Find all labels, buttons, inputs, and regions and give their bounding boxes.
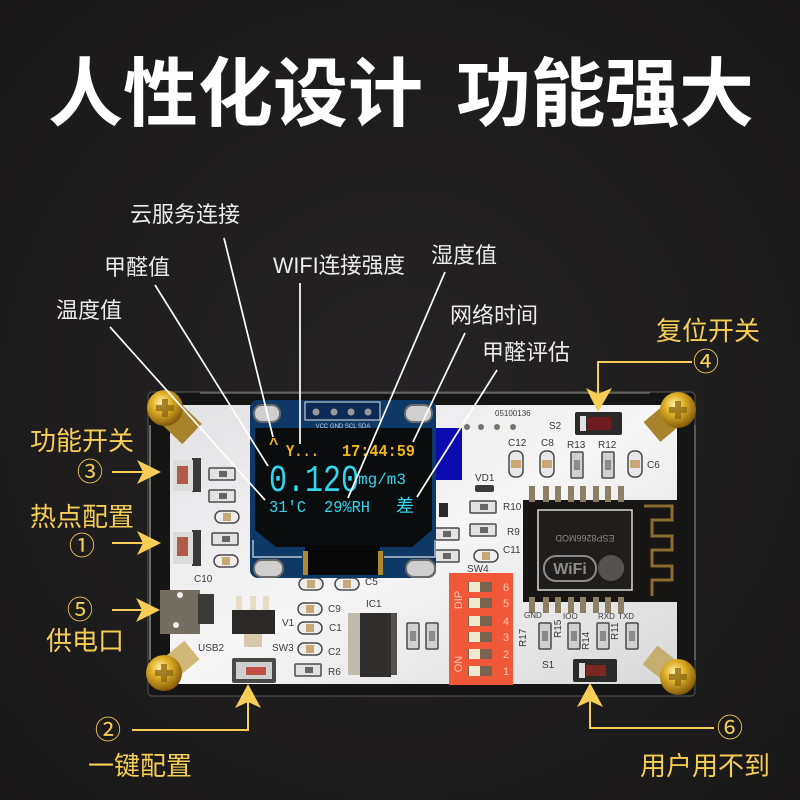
number 5: ⑤ <box>67 595 93 625</box>
number 2: ② <box>95 715 121 745</box>
label: user unused: 用户用不到 <box>640 751 770 781</box>
silkscreen labels: S1 <box>542 660 555 671</box>
silkscreen labels: TXD <box>618 612 634 621</box>
DIP switch: 2 <box>503 649 509 661</box>
silkscreen labels: R15 <box>553 619 564 638</box>
number 4: ④ <box>693 347 719 377</box>
label: power port: 供电口 <box>46 626 124 656</box>
DIP switch: ON <box>453 656 465 672</box>
DIP switch: 3 <box>503 632 509 644</box>
DIP switch <box>449 573 513 685</box>
DIP switch: 1 <box>503 666 509 678</box>
silkscreen labels: GND <box>524 611 542 620</box>
screen readout: 0.120 <box>269 460 359 503</box>
function switch <box>173 458 201 492</box>
left small components <box>209 468 239 567</box>
wifi module area: WiFi <box>553 561 587 578</box>
label: wifi strength: WIFI连接强度 <box>273 253 405 278</box>
silkscreen labels: SW4 <box>467 564 489 575</box>
silkscreen labels: R12 <box>598 440 617 451</box>
leader lines <box>110 238 497 500</box>
hotspot switch <box>173 530 201 566</box>
screen readout: 29%RH <box>324 499 370 518</box>
arrow: user unused <box>577 683 714 728</box>
title: 人性化设计 <box>48 52 423 136</box>
label: network time: 网络时间 <box>450 303 538 328</box>
silkscreen labels: R14 <box>581 631 592 650</box>
screen readout: 17:44:59 <box>342 443 415 462</box>
title <box>48 52 754 136</box>
silkscreen labels: 05100136 <box>495 409 531 418</box>
DIP switch: 6 <box>503 582 509 594</box>
silkscreen labels: V1 <box>282 618 295 629</box>
antenna trace <box>644 506 672 596</box>
silkscreen labels: C11 <box>503 545 521 556</box>
button S2 <box>575 412 622 435</box>
screen readout: ^ <box>269 436 279 454</box>
button S1 <box>573 659 617 682</box>
label: function switch: 功能开关 <box>30 426 134 456</box>
arrow: function switch <box>112 460 161 484</box>
circuit board <box>160 405 677 685</box>
silkscreen labels: IOO <box>563 612 578 621</box>
label: formaldehyde value: 甲醛值 <box>104 255 170 280</box>
label: reset switch: 复位开关 <box>656 316 760 346</box>
label: cloud service: 云服务连接 <box>130 202 240 227</box>
arrow: hotspot config <box>112 531 161 555</box>
arrow: reset switch <box>586 362 692 412</box>
screen <box>255 428 432 547</box>
silkscreen labels: R17 <box>518 628 529 647</box>
silkscreen labels: C2 <box>328 647 341 658</box>
silkscreen labels: R6 <box>328 667 341 678</box>
wifi module area <box>523 486 677 613</box>
micro USB port <box>160 590 214 634</box>
screen readout: Y... <box>286 443 319 462</box>
top right components <box>433 451 642 562</box>
silkscreen labels: C12 <box>508 438 527 449</box>
silkscreen labels: C5 <box>365 577 378 588</box>
screen readout: 差 <box>396 496 414 516</box>
arrow: power port <box>112 598 160 622</box>
silkscreen labels: C10 <box>194 574 213 585</box>
label: temperature: 温度值 <box>56 298 122 323</box>
silkscreen labels: USB2 <box>198 643 225 654</box>
silkscreen labels: C8 <box>541 438 554 449</box>
blue component <box>436 428 462 480</box>
label: hotspot config: 热点配置 <box>30 502 134 532</box>
label: humidity: 湿度值 <box>431 243 497 268</box>
silkscreen labels: R11 <box>610 622 621 640</box>
voltage regulator <box>232 596 275 647</box>
silkscreen labels: SW3 <box>272 643 294 654</box>
label: one-key config: 一键配置 <box>88 751 192 781</box>
white board outline <box>253 540 435 557</box>
OLED module <box>250 400 436 578</box>
IC1 chip <box>348 613 397 677</box>
header pins: VCC GND SCL SDA <box>316 424 370 430</box>
bottom C5 row <box>299 578 359 590</box>
silkscreen labels: C6 <box>647 460 660 471</box>
button SW3 <box>232 658 276 683</box>
label: formaldehyde rating: 甲醛评估 <box>482 340 570 365</box>
silkscreen labels: R9 <box>507 527 520 538</box>
acrylic frame <box>148 392 695 696</box>
silkscreen labels: IC1 <box>366 599 382 610</box>
ribbon connector <box>303 545 383 575</box>
DIP switch: 5 <box>503 598 509 610</box>
header pins <box>305 402 380 430</box>
silkscreen labels <box>194 409 660 678</box>
top pads <box>464 424 516 430</box>
silkscreen labels: VD1 <box>475 473 495 484</box>
number 1: ① <box>69 531 95 561</box>
silkscreen labels: C9 <box>328 604 341 615</box>
DIP switch: DIP <box>453 591 465 609</box>
brass standoffs and screws <box>146 390 696 695</box>
mounting holes <box>254 405 435 577</box>
arrow: one-key config <box>132 684 261 730</box>
title: 功能强大 <box>456 52 754 136</box>
silkscreen labels: R10 <box>503 502 522 513</box>
number 3: ③ <box>77 457 103 487</box>
wifi module area: ESP8266MOD <box>555 533 615 543</box>
lower right components <box>539 623 638 649</box>
silkscreen labels: C1 <box>329 623 342 634</box>
silkscreen labels: RXD <box>598 612 615 621</box>
right of chip resistors <box>407 623 438 649</box>
screen readout: mg/m3 <box>358 471 406 489</box>
capacitors and resistor <box>295 603 322 676</box>
silkscreen labels: S2 <box>549 421 562 432</box>
screen readout: 31'C <box>269 499 306 518</box>
DIP switch: 4 <box>503 616 509 628</box>
silkscreen labels: R13 <box>567 440 586 451</box>
screen readout <box>269 436 415 518</box>
number 6: ⑥ <box>717 713 743 743</box>
